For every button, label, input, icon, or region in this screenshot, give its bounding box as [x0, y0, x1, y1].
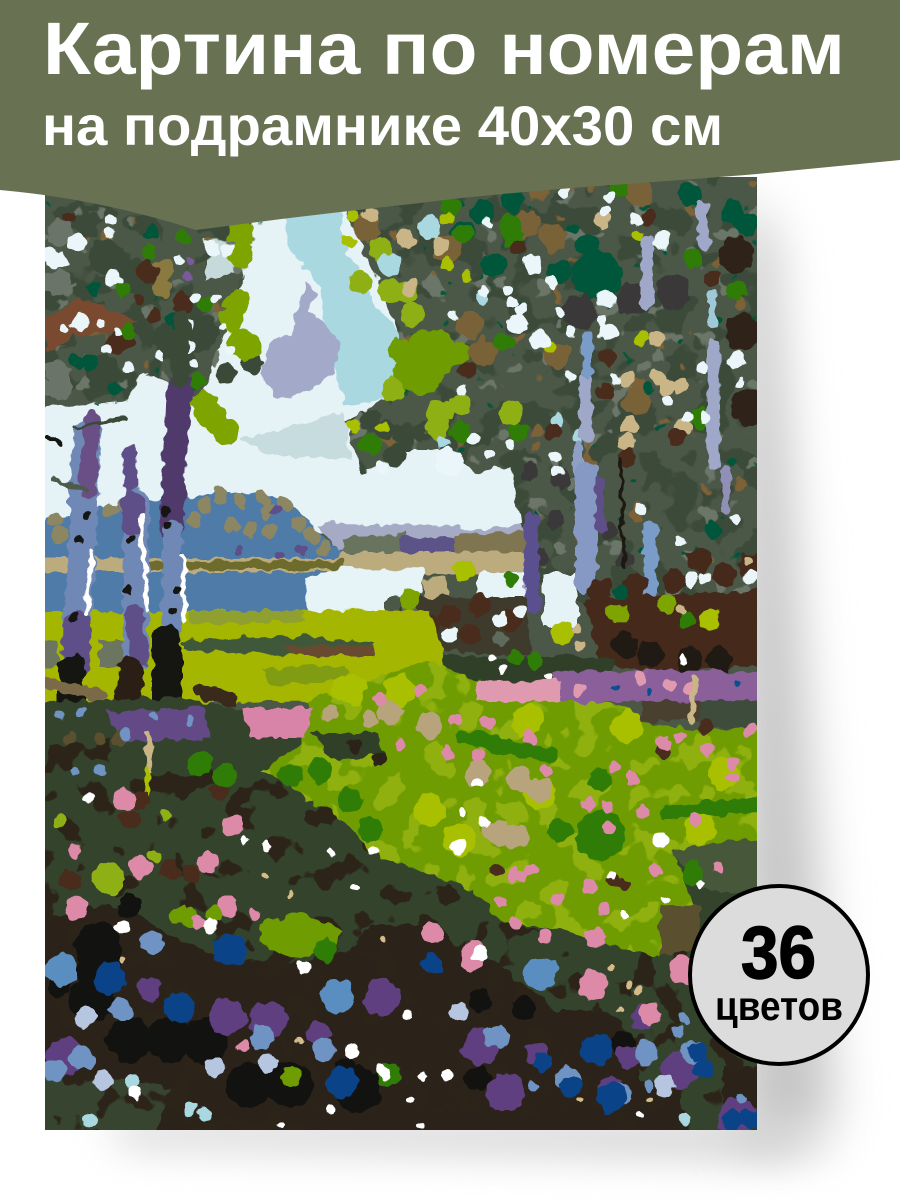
distant tree line and lake	[45, 492, 527, 615]
birch trunks in the right forest	[531, 205, 726, 607]
right lower forest	[400, 530, 770, 682]
right crown patches	[348, 188, 750, 458]
flower field: dark masses	[60, 790, 623, 1090]
badge: 36 colours	[690, 886, 868, 1064]
flower field: green leaves	[60, 765, 388, 1077]
left crown patches	[47, 217, 253, 430]
background foliage base	[45, 177, 757, 732]
hanging branch and far-side gaps	[370, 420, 625, 627]
foliage white gaps	[383, 192, 740, 540]
lower field base	[30, 698, 770, 1150]
badge: 36 colours: цветов	[715, 983, 843, 1029]
left birch trunks	[45, 320, 184, 665]
top banner	[0, 0, 900, 230]
sky	[30, 205, 525, 532]
foliage mottling	[30, 170, 770, 600]
pink and purple flower bands	[60, 670, 760, 798]
central meadow	[260, 661, 757, 958]
badge: 36 colours: 36	[741, 911, 816, 994]
flower field: blooms	[55, 690, 750, 1125]
canvas drop shadow	[100, 190, 840, 1158]
meadow behind the trees	[30, 610, 445, 705]
subtitle: на подрамнике 40х30 см	[42, 94, 723, 157]
tree bases	[50, 640, 230, 705]
painting canvas	[30, 160, 770, 1150]
title: Картина по номерам	[43, 7, 845, 90]
